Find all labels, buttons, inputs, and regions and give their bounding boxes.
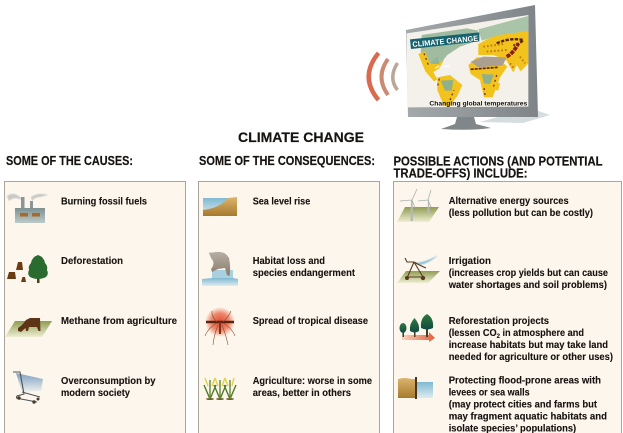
map screen (407, 15, 528, 107)
icon: polar bear on ice (202, 252, 238, 286)
map screen: CLIMATE CHANGE (412, 34, 479, 49)
map caption: Changing global temperatures (429, 100, 528, 107)
label: protecting flood-prone areas (449, 376, 607, 433)
label: reforestation: increase habitats but may take land (449, 340, 608, 351)
label: habitat loss: species endangerment (253, 268, 356, 279)
label: burning fossil fuels: Burning fossil fuels (61, 196, 147, 208)
label: protecting flood-prone areas: levees or sea walls (449, 388, 530, 398)
label: agriculture: Agriculture: worse in some (253, 376, 372, 387)
icon: crops (204, 378, 236, 400)
label: agriculture (253, 376, 372, 399)
label: reforestation: needed for agriculture or other uses) (449, 352, 613, 363)
label: protecting flood-prone areas: (may protect cities and farms but (449, 400, 598, 410)
icon: shopping cart (13, 372, 43, 404)
icon: wind turbines (397, 189, 439, 222)
heading: actions (394, 154, 603, 180)
label: agriculture: areas, better in others (253, 388, 351, 399)
label: deforestation: Deforestation (61, 256, 123, 267)
icon: mosquito (205, 307, 235, 345)
icon: sound waves (369, 53, 398, 100)
label: overconsumption (61, 376, 156, 399)
icon: deforestation (7, 255, 48, 283)
icon: cow on pasture (5, 318, 52, 337)
label: protecting flood-prone areas: may fragment aquatic habitats and (449, 412, 607, 422)
label: reforestation: in atmosphere and (500, 328, 584, 339)
label: alternative energy (449, 196, 593, 219)
icon: factory (7, 194, 48, 223)
label: overconsumption: Overconsumption by (61, 376, 156, 387)
illustration: television showing climate map (406, 5, 550, 130)
icon: reforestation (400, 314, 435, 342)
label: reforestation: Reforestation projects (449, 316, 549, 327)
panel: actions (394, 154, 622, 433)
icon: sea level rise (203, 197, 237, 216)
label: spread of tropical disease: Spread of tropical disease (253, 316, 368, 327)
label: habitat loss: Habitat loss and (253, 256, 325, 267)
map title banner (410, 32, 479, 49)
label: reforestation: 2 (497, 333, 500, 340)
label: habitat loss (253, 256, 356, 279)
monitor stand (441, 117, 491, 130)
heading: consequences: SOME OF THE CONSEQUENCES: (199, 154, 375, 168)
heading: causes: SOME OF THE CAUSES: (6, 154, 133, 168)
icon: irrigation (397, 255, 440, 283)
monitor shadow (480, 108, 550, 123)
label: sea level rise: Sea level rise (253, 196, 311, 208)
label: alternative energy: (less pollution but can be costly) (449, 208, 593, 219)
map speckles (424, 39, 525, 100)
label: reforestation (449, 316, 613, 363)
label: methane from agriculture: Methane from agriculture (61, 316, 177, 327)
icon: levee (398, 377, 433, 399)
heading: actions: TRADE-OFFS) INCLUDE: (394, 166, 528, 180)
title: CLIMATE CHANGE (238, 129, 364, 145)
label: irrigation (448, 256, 608, 291)
label: irrigation: (increases crop yields but can cause (449, 268, 608, 279)
label: overconsumption: modern society (61, 388, 130, 399)
panel: consequences (198, 154, 380, 433)
label: reforestation: (lessen CO (449, 328, 501, 339)
monitor bezel (406, 5, 538, 117)
label: irrigation: Irrigation (449, 256, 491, 267)
label: protecting flood-prone areas: Protecting flood-prone areas with (449, 376, 601, 386)
label: irrigation: water shortages and soil problems) (448, 280, 607, 291)
panel: causes (4, 154, 186, 433)
world map land masses (418, 16, 528, 107)
label: alternative energy: Alternative energy sources (449, 196, 569, 207)
heading: actions: POSSIBLE ACTIONS (AND POTENTIAL (394, 154, 603, 168)
